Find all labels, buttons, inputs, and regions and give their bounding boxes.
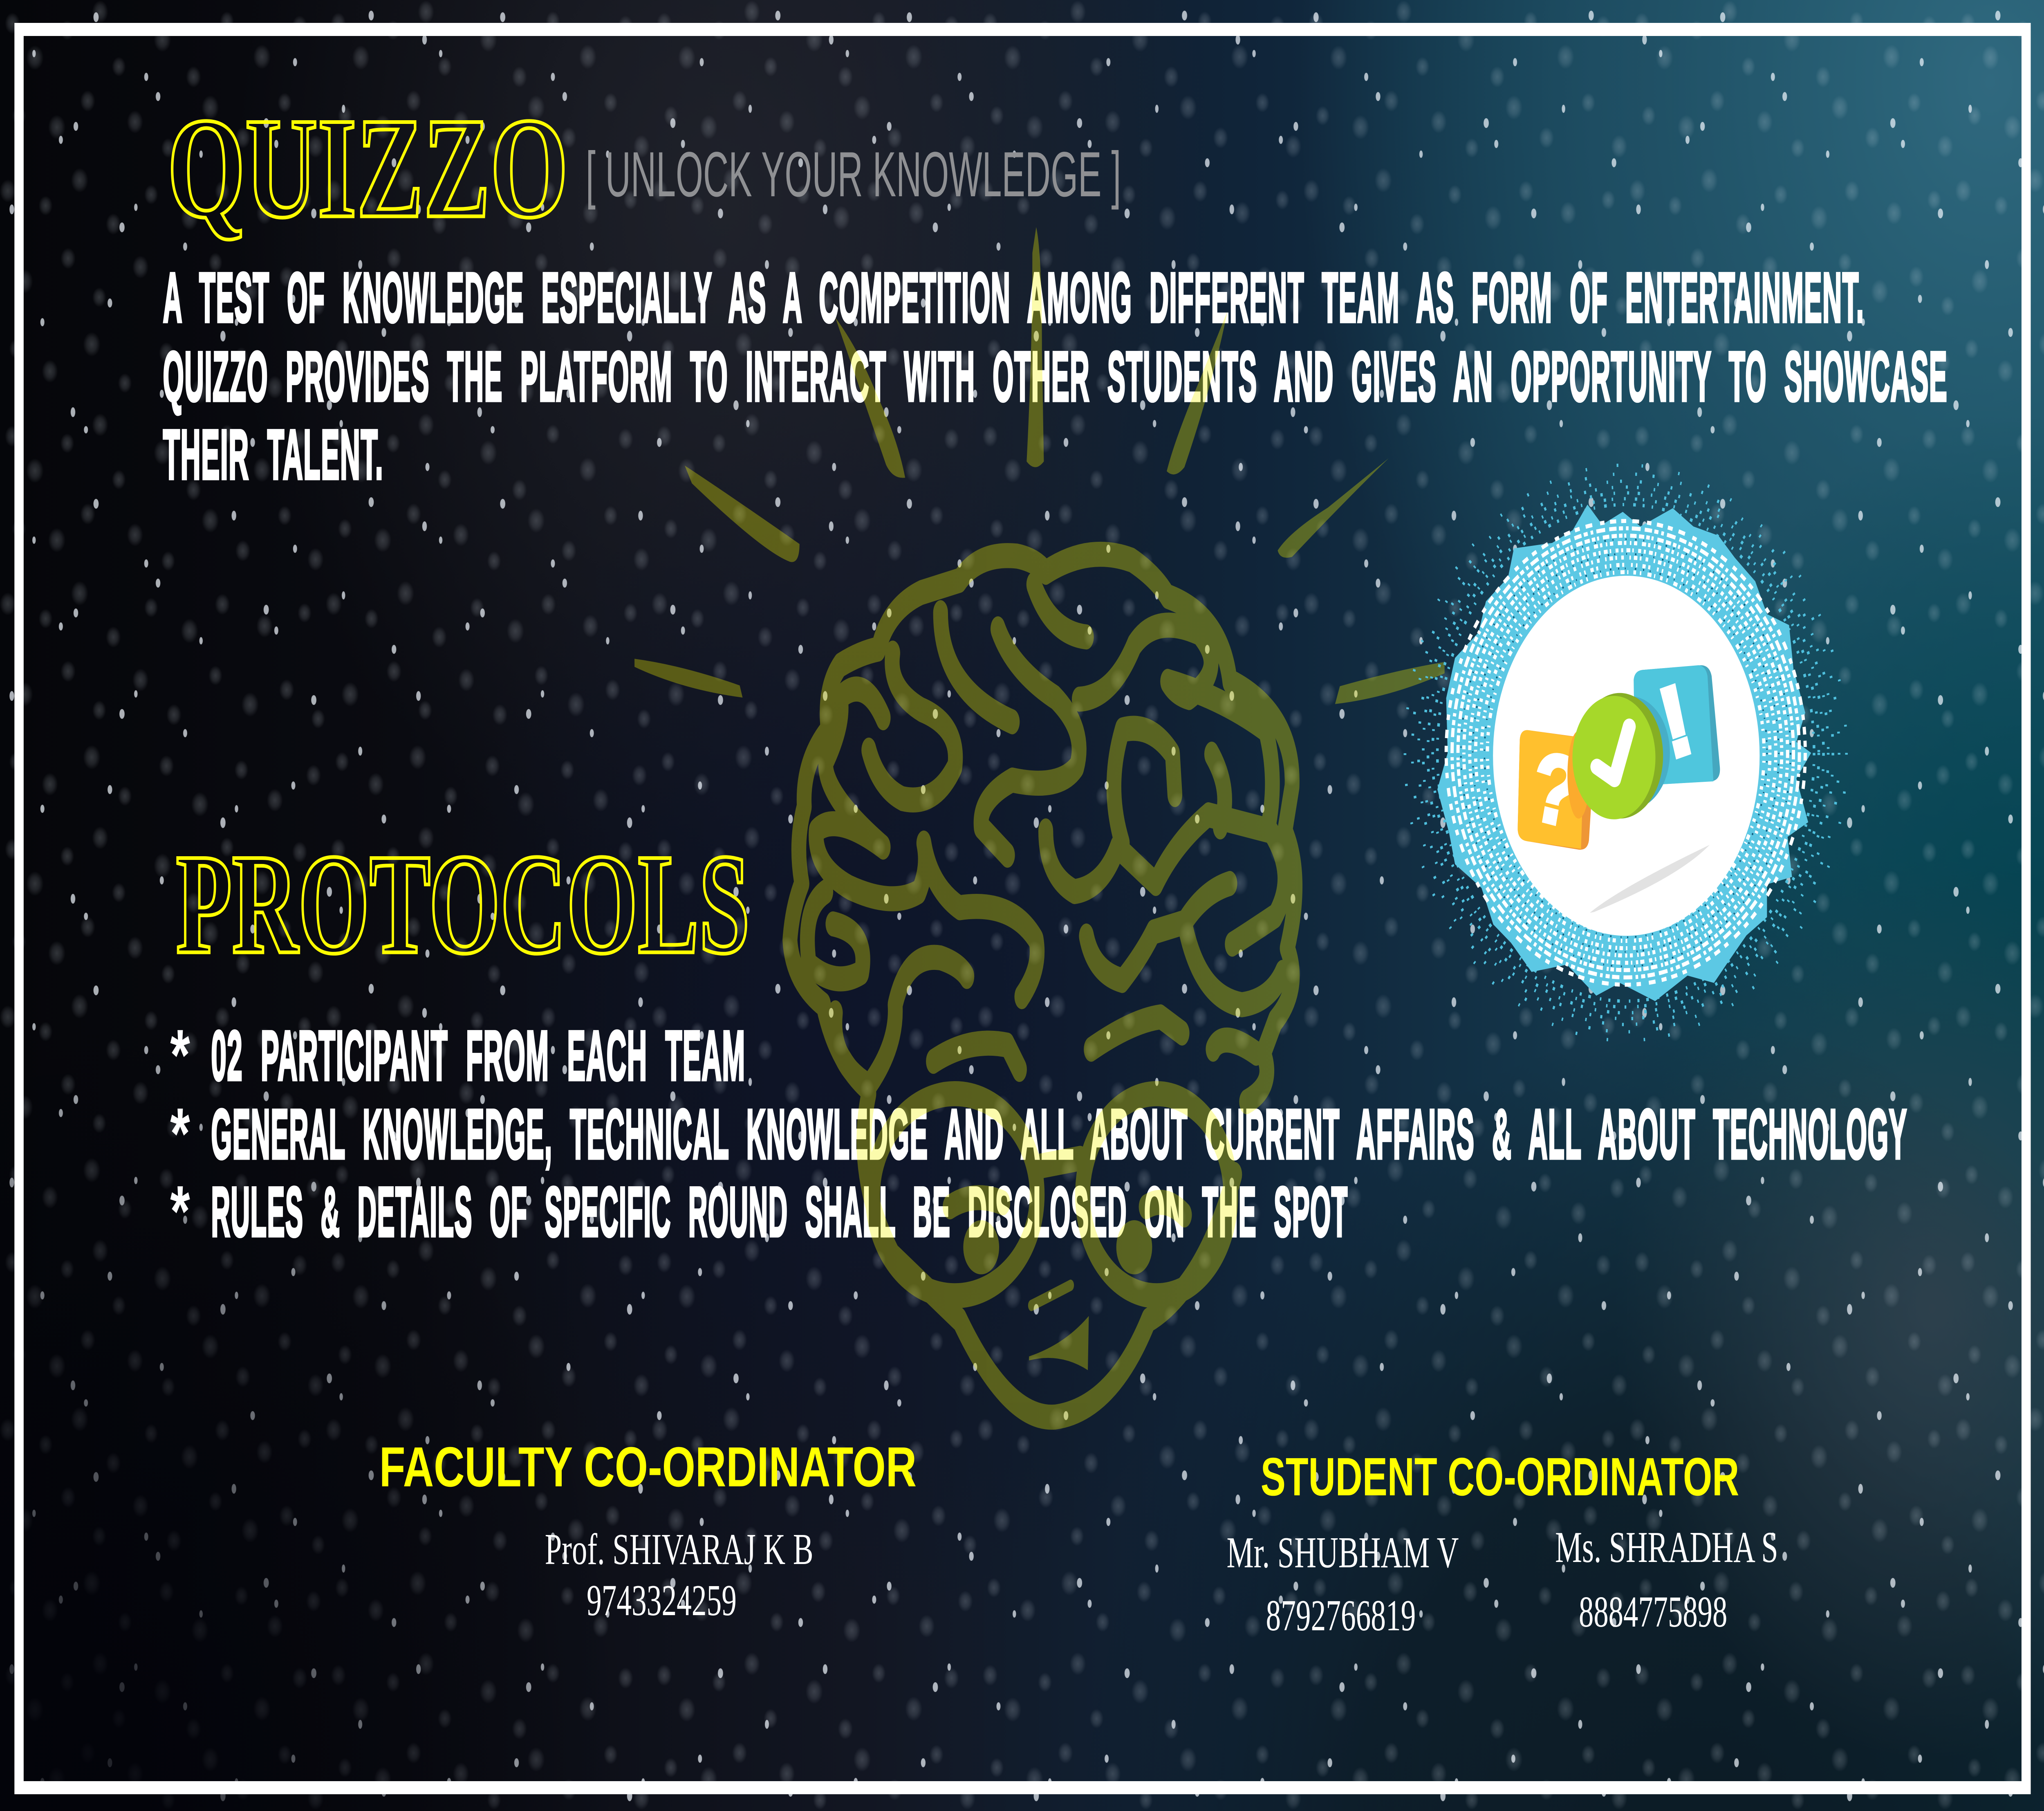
- protocol list: 02 PARTICIPANT FROM EACH TEAM: [211, 1016, 746, 1095]
- description text: THEIR TALENT.: [163, 415, 383, 494]
- description text: QUIZZO PROVIDES THE PLATFORM TO INTERACT WITH OTHER STUDENTS AND GIVES AN OPPORTUNITY TO SHOWCASE: [163, 337, 1948, 416]
- protocol list: *: [170, 1093, 190, 1174]
- green check coin: [1567, 693, 1670, 819]
- student co-ordinator: [1227, 1447, 1778, 1640]
- protocol list: RULES & DETAILS OF SPECIFIC ROUND SHALL BE DISCLOSED ON THE SPOT: [211, 1172, 1348, 1251]
- glitter ring: [1437, 505, 1811, 1001]
- shadow: [1590, 845, 1710, 913]
- heading: PROTOCOLS: PROTOCOLS: [176, 824, 750, 983]
- faculty co-ordinator: 9743324259: [587, 1576, 737, 1625]
- white disc: [1493, 576, 1759, 936]
- heading: QUIZZO: QUIZZO: [167, 88, 568, 247]
- faculty co-ordinator: FACULTY CO-ORDINATOR: [379, 1436, 917, 1499]
- description text: A TEST OF KNOWLEDGE ESPECIALLY AS A COMPETITION AMONG DIFFERENT TEAM AS FORM OF ENTERTAINMENT.: [163, 258, 1864, 337]
- student co-ordinator: 8884775898: [1579, 1588, 1727, 1636]
- student co-ordinator: STUDENT CO-ORDINATOR: [1261, 1447, 1739, 1507]
- faculty co-ordinator: Prof. SHIVARAJ K B: [545, 1525, 814, 1574]
- protocol list: *: [170, 1015, 190, 1095]
- quiz badge: [1405, 465, 1847, 1041]
- glitter speckle: [1446, 521, 1805, 985]
- protocol list: GENERAL KNOWLEDGE, TECHNICAL KNOWLEDGE AND ALL ABOUT CURRENT AFFAIRS & ALL ABOUT TECHNOLOGY: [211, 1095, 1907, 1174]
- description text: [163, 258, 1948, 494]
- student co-ordinator: Ms. SHRADHA S: [1555, 1523, 1778, 1572]
- icon: brain with glasses: [634, 227, 1445, 1417]
- protocol list: [170, 1015, 1907, 1252]
- tagline: [ UNLOCK YOUR KNOWLEDGE ]: [586, 139, 1121, 210]
- orange card: ?: [1524, 730, 1589, 850]
- student co-ordinator: 8792766819: [1266, 1591, 1416, 1640]
- blue card: !: [1651, 664, 1701, 779]
- faculty co-ordinator: [379, 1436, 917, 1625]
- student co-ordinator: Mr. SHUBHAM V: [1227, 1528, 1459, 1577]
- blue card: [1634, 664, 1720, 785]
- protocol list: *: [170, 1171, 190, 1252]
- glitter halo: [1405, 465, 1847, 1041]
